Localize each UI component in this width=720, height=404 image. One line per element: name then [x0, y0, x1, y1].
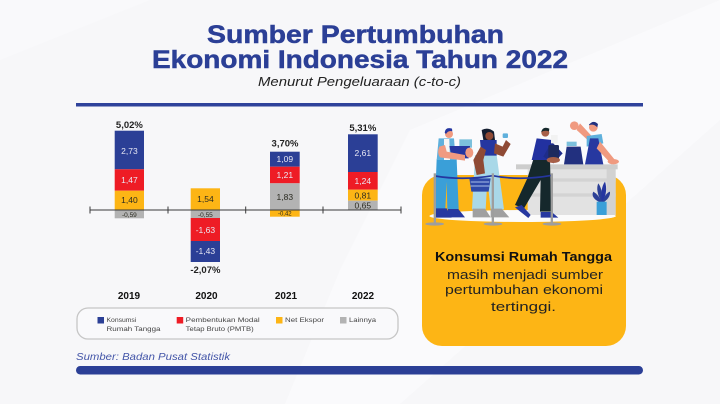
axis	[90, 206, 401, 214]
bar: 2020: -0,55	[198, 212, 213, 219]
callout text: Konsumsi Rumah Tangga	[435, 249, 613, 264]
year labels: 2022	[352, 291, 375, 302]
year labels: 2021	[275, 291, 298, 302]
legend: Pembentukan Modal	[186, 317, 260, 324]
bar: 2021: -0,42	[278, 212, 292, 218]
bar: 2020	[190, 188, 221, 276]
callout text	[435, 249, 613, 314]
bar: 2020: -2,07%	[190, 265, 221, 276]
bar: 2019: 5,02%	[116, 120, 143, 131]
plant	[593, 182, 610, 215]
footer bar	[76, 366, 643, 374]
bar: 2022: 5,31%	[349, 123, 377, 134]
header rule	[76, 103, 643, 106]
callout text: masih menjadi sumber	[447, 268, 603, 282]
legend: Konsumsi	[106, 317, 137, 324]
legend: Lainnya	[349, 317, 376, 324]
bar: 2020: -1,43	[196, 246, 215, 256]
legend: Tetap Bruto (PMTB)	[186, 326, 254, 333]
bar: 2020: 1,54	[197, 194, 214, 204]
icon: shoppers queue illustration	[425, 121, 619, 226]
cashier	[570, 121, 619, 164]
stanchions and rope	[425, 173, 561, 226]
bar: 2021: 1,21	[277, 170, 293, 180]
bar: 2019	[115, 120, 144, 219]
bar: 2019: -0,59	[122, 212, 137, 219]
bar: 2022: 1,24	[355, 176, 371, 186]
bar: 2021: 1,83	[277, 192, 293, 202]
year labels: 2019	[118, 291, 141, 302]
year labels	[118, 291, 375, 302]
bar: 2021: 1,09	[277, 154, 293, 164]
title: Sumber Pertumbuhan	[207, 21, 504, 49]
bar: 2022: 2,61	[355, 148, 371, 158]
customer with groceries	[435, 128, 473, 218]
title	[152, 21, 568, 74]
bar: 2019: 1,47	[121, 175, 138, 185]
title: Ekonomi Indonesia Tahun 2022	[152, 46, 568, 74]
bar: 2021	[270, 138, 300, 218]
legend: Rumah Tangga	[106, 326, 161, 333]
customer with coffee	[515, 128, 563, 218]
customer with basket	[469, 129, 511, 217]
callout text: tertinggi.	[491, 300, 556, 314]
panel: highlight callout	[422, 175, 626, 346]
stacked bar chart	[90, 120, 401, 302]
bar: 2022: 0,81	[355, 190, 371, 200]
counter	[516, 164, 618, 215]
legend	[77, 308, 398, 339]
bar: 2019: 2,73	[121, 146, 138, 156]
floor	[429, 210, 616, 222]
source note: Sumber: Badan Pusat Statistik	[76, 351, 231, 363]
bar: 2019: 1,40	[121, 195, 138, 205]
bar: 2022: 0,65	[355, 200, 371, 210]
year labels: 2020	[195, 291, 218, 302]
cash register	[564, 142, 583, 164]
legend: Net Ekspor	[285, 317, 325, 324]
subtitle: Menurut Pengeluaraan (c-to-c)	[258, 75, 461, 89]
bar: 2020: -1,63	[196, 225, 215, 235]
callout text: pertumbuhan ekonomi	[445, 283, 603, 297]
bar: 2022	[348, 123, 378, 210]
bar: 2021: 3,70%	[272, 138, 299, 150]
